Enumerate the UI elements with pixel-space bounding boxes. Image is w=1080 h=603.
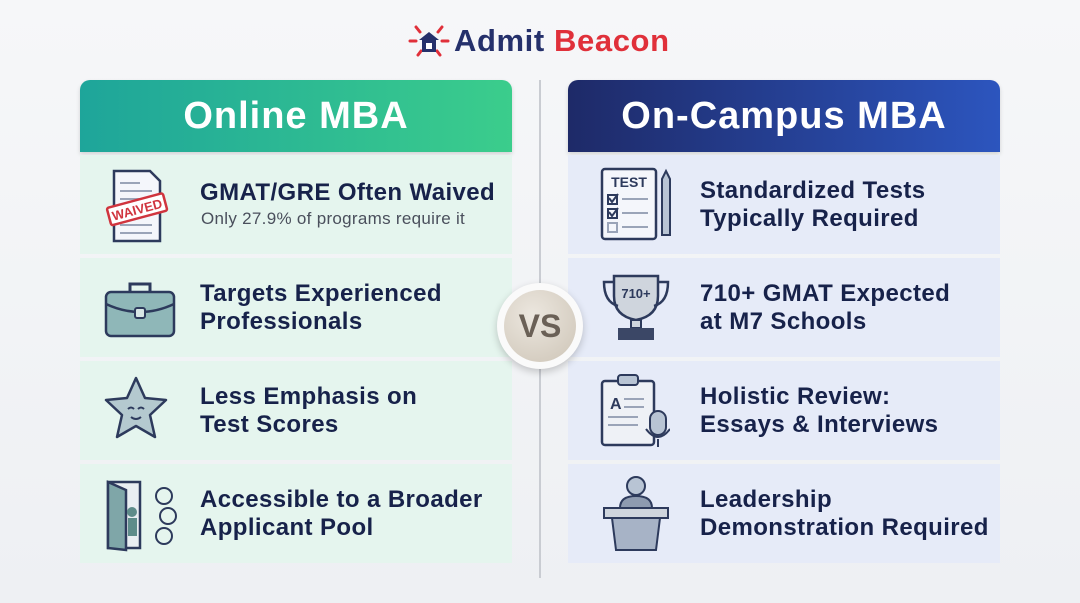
text: Professionals — [200, 308, 363, 335]
text: Targets Experienced — [200, 280, 442, 307]
text: Essays & Interviews — [700, 411, 938, 438]
icon: trophy — [602, 274, 670, 340]
row: standardized tests — [568, 155, 1000, 254]
row: GMAT waived — [80, 155, 512, 254]
text: Standardized Tests — [700, 177, 925, 204]
icon: door and people — [106, 480, 177, 552]
text: Test Scores — [200, 411, 339, 438]
text: Accessible to a Broader — [200, 486, 483, 513]
icon: clipboard and mic: A — [610, 396, 622, 413]
brand name: Admit Beacon — [454, 23, 670, 58]
icon: test sheet and pencil: TEST — [611, 174, 647, 190]
icon: waived document: WAIVED — [110, 196, 164, 224]
text — [700, 280, 950, 335]
text: Less Emphasis on — [200, 383, 417, 410]
row: less emphasis on test scores — [80, 361, 512, 460]
logo — [408, 23, 670, 58]
text — [200, 486, 483, 541]
divider — [539, 80, 541, 578]
text — [200, 280, 442, 335]
icon: podium — [603, 476, 669, 551]
text: Applicant Pool — [200, 514, 374, 541]
row: experienced professionals — [80, 258, 512, 357]
VS badge — [497, 283, 583, 369]
heading: Online MBA — [80, 80, 512, 152]
text: 710+ GMAT Expected — [700, 280, 950, 307]
icon: clipboard and mic — [600, 374, 670, 447]
heading: Online MBA: Online MBA — [183, 95, 409, 137]
row: holistic review — [568, 361, 1000, 460]
text: Typically Required — [700, 205, 919, 232]
text — [700, 486, 989, 541]
heading: On-Campus MBA: On-Campus MBA — [621, 95, 947, 137]
text — [200, 383, 417, 438]
heading: On-Campus MBA — [568, 80, 1000, 152]
text: Leadership — [700, 486, 832, 513]
text: Demonstration Required — [700, 514, 989, 541]
row: broader pool — [80, 464, 512, 563]
text — [700, 177, 925, 232]
icon: star — [104, 376, 168, 438]
text: GMAT/GRE Often Waived — [200, 179, 495, 206]
row: leadership — [568, 464, 1000, 563]
icon: trophy: 710+ — [621, 286, 651, 301]
subtext: Only 27.9% of programs require it — [201, 209, 465, 228]
row: 710+ GMAT — [568, 258, 1000, 357]
text — [700, 383, 938, 438]
icon: test sheet and pencil — [600, 168, 671, 240]
icon: waived document — [106, 170, 168, 242]
icon: briefcase — [104, 282, 176, 338]
text: Holistic Review: — [700, 383, 890, 410]
VS badge: VS — [519, 308, 561, 344]
text: at M7 Schools — [700, 308, 867, 335]
icon: beacon house — [408, 25, 450, 57]
